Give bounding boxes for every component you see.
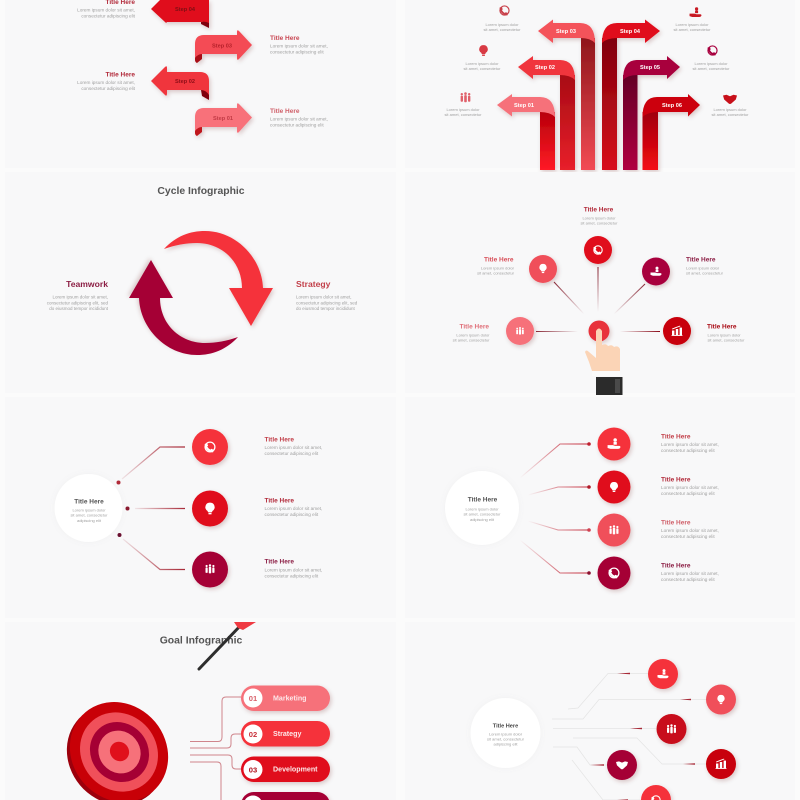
hub circle: Lorem ipsum dolor [489,732,523,736]
text: lower right title [707,324,745,342]
text: branch one: Title Here [264,436,294,444]
node: bulb [706,684,736,714]
text: top title: sit amet, consectetur [581,220,618,226]
pill: 01 marketing [241,686,330,711]
text: step 02 label: sit amet, consectetur [464,66,501,71]
text: step 03 description: Lorem ipsum dolor sit amet, [270,44,328,48]
text: step 01 description: consectetur adipiscing elit [270,122,324,128]
text: step 02 description: Lorem ipsum dolor sit amet, [77,80,135,85]
text: right title [686,256,724,276]
heading: cycle infographic: Cycle Infographic [157,186,245,197]
text: strategy: Strategy [296,279,331,289]
text: left title [477,256,515,276]
arrow: step 03: Step 03 [212,44,232,50]
text: step 03 label: sit amet, consectetur [484,27,521,32]
arrow: step 05 upward right: Step 05 [640,65,660,71]
arrow: step 02: Step 02 [175,79,195,85]
arrow: step 03 upward left [538,20,595,170]
panel: radial touch diagram [405,172,795,395]
node: people [656,714,686,744]
panel: four branch diagram [405,397,795,618]
node: handshake [607,750,637,780]
icon: pointing hand [585,328,622,395]
text: teamwork: Lorem ipsum dolor sit amet, [52,294,108,300]
hub circle: Title Here [493,724,518,730]
node: center button [588,320,610,342]
hub circle: adipiscing elit [77,518,102,523]
text: branch two [661,476,719,496]
text: branch four: Lorem ipsum dolor sit amet, [661,571,719,576]
text: step 01 label: sit amet, consectetur [445,112,482,117]
text: teamwork: consectetur adipiscing elit, sed [47,300,108,306]
text: teamwork: do eiusmod tempor incididunt [49,306,109,311]
pill: 03 development: 03 [249,765,257,774]
text: teamwork [47,279,109,311]
pill: 02 strategy: 02 [249,730,257,739]
text: step 02 label [464,61,501,71]
node: top phone [584,236,612,264]
arrow: step 03 upward left: Step 03 [556,29,576,35]
text: top title: Lorem ipsum dolor [582,216,616,220]
text: left title: Title Here [484,256,514,264]
text: branch four: consectetur adipiscing elit [661,577,715,582]
node: people [192,552,228,588]
text: step 03 label [484,22,521,32]
hub circle [54,474,122,542]
text: step 03 description: Title Here [270,35,300,42]
pill: 01 marketing: 01 [249,694,258,703]
arrow: step 04 upward right: Step 04 [620,29,641,35]
text: step 06 label [712,107,749,117]
node: bulb [192,490,228,526]
node: phone [598,556,630,590]
node: hand [648,659,678,689]
pill: 04 cropped [241,792,330,800]
text: branch three: Lorem ipsum dolor sit amet, [264,568,322,572]
text: lower left title: Title Here [459,324,489,330]
text: step 04 label: Lorem ipsum dolor [675,22,709,27]
hub circle: adipiscing elit [470,517,495,522]
arrow: step 01: Step 01 [213,116,233,122]
node: chart [706,749,736,779]
text: step 01 description: Title Here [270,108,300,115]
arrow: step 05 upward right [623,56,680,170]
arrow: step 04: Step 04 [175,7,196,13]
hub circle: adipiscing elit [493,742,518,746]
node: left bulb [529,255,557,283]
text: branch three: Title Here [661,520,691,526]
text: step 04 label [674,22,711,32]
text: branch two: consectetur adipiscing elit [661,491,715,496]
pill: 02 strategy: Strategy [273,730,301,738]
hub circle: sit amet, consectetur [71,512,108,518]
hub circle: Lorem ipsum dolor [72,508,106,512]
text: lower right title: sit amet, consectetur [708,338,745,342]
text: step 05 label [693,61,730,71]
text: branch four: Title Here [661,562,691,570]
node: right hand [642,258,670,286]
text: lower right title: Title Here [707,324,737,330]
text: branch two: Lorem ipsum dolor sit amet, [264,506,322,511]
text: step 06 label: sit amet, consectetur [712,112,749,117]
text: branch two: Title Here [661,476,691,484]
node: lower right chart [663,317,691,345]
text: branch one: consectetur adipiscing elit [264,451,319,456]
text: step 04 label: sit amet, consectetur [674,27,711,32]
text: lower left title [453,324,490,342]
icon: target board [47,682,188,800]
arrow: step 06 upward right: Step 06 [662,103,682,109]
text: lower left title: Lorem ipsum dolor [456,332,490,338]
arrow: step 01 upward left: Step 01 [514,103,534,109]
panel: step arrows tree [405,0,795,170]
connector arrow marks [590,673,695,800]
text: branch one: Title Here [661,434,691,440]
icon: arrow dart [199,622,256,669]
connectors with dots [520,442,591,575]
text: strategy [296,279,358,311]
panel: goal infographic [5,622,396,800]
text: top title: Title Here [584,206,614,214]
hub circle: sit amet, consectetur [464,512,501,516]
text: step 04 description: consectetur adipiscing elit [81,14,136,18]
text: step 01 description: Lorem ipsum dolor sit amet, [270,116,328,122]
text: right title: Lorem ipsum dolor [686,266,720,270]
text: lower left title: sit amet, consectetur [453,338,490,342]
text: branch three: consectetur adipiscing elit [264,574,319,578]
text: lower right title: Lorem ipsum dolor [708,332,741,338]
heading: goal infographic: Goal Infographic [160,636,242,646]
hub circle: Title Here [468,496,498,504]
panel: cycle infographic [5,172,396,393]
text: step 05 label: sit amet, consectetur [693,66,730,71]
panel: network diagram [405,622,795,800]
text: left title: sit amet, consectetur [477,270,515,276]
text: top title [581,206,618,226]
text: step 03 label: Lorem ipsum dolor [485,22,519,27]
text: right title: Title Here [686,256,716,264]
text: step 02 label: Lorem ipsum dolor [465,61,499,66]
node: hand [598,428,630,460]
text: branch one: Lorem ipsum dolor sit amet, [264,445,322,450]
text: strategy: Lorem ipsum dolor sit amet, [296,294,352,300]
text: strategy: consectetur adipiscing elit, sed [296,300,358,306]
hub circle: sit amet, consectetur [487,736,525,742]
text: branch one: Lorem ipsum dolor sit amet, [661,442,719,447]
connectors with dots [116,447,185,570]
text: branch one: consectetur adipiscing elit [661,448,715,453]
node: lower left people [506,317,534,345]
text: branch two: consectetur adipiscing elit [264,512,319,517]
node: phone cropped [641,785,671,800]
text: step 05 label: Lorem ipsum dolor [694,61,728,66]
pill: 03 development: Development [273,766,318,774]
text: branch two: Lorem ipsum dolor sit amet, [661,485,719,490]
arrow: step 02 upward left [518,56,575,170]
text: step 06 label: Lorem ipsum dolor [713,107,747,112]
arrow: step 04 [151,0,209,28]
text: branch four [661,562,719,582]
arrow: step 01 upward left [497,94,555,170]
text: branch three: Lorem ipsum dolor sit amet, [661,528,719,533]
hub circle: Title Here [74,498,104,506]
pill: 01 marketing: Marketing [273,694,307,702]
node: phone [192,429,228,465]
text: branch two: Title Here [264,498,294,504]
arrow: cycle left crimson [129,260,238,355]
text: step 02 description: Title Here [105,72,135,78]
connector lines [552,674,706,800]
text: branch one [661,434,719,453]
radial connector lines [536,267,660,332]
icon: phone step 03 [500,6,509,15]
panel: step arrows zigzag [5,0,396,168]
hub circle [470,698,540,768]
panel: three branch diagram [5,397,396,618]
arrow: step 02 upward left: Step 02 [535,65,555,71]
arrow: step 04 upward right [602,20,660,170]
icon: clock step 05 [708,46,717,55]
text: branch two [264,498,322,517]
node: bulb [598,470,630,504]
icon: people step 01 [461,92,470,102]
text: step 04 description: Lorem ipsum dolor sit amet, [77,8,135,12]
hub circle: Lorem ipsum dolor [465,506,499,512]
node: people [598,514,630,546]
connectors to pills [190,697,241,800]
arrow: step 03 [195,30,252,63]
text: step 01 label [445,107,482,117]
arrow: cycle right red [164,231,273,326]
text: teamwork: Teamwork [66,279,108,289]
text: branch three: consectetur adipiscing elit [661,534,715,539]
hub circle [445,471,519,545]
text: step 04 description [77,0,136,18]
text: strategy: do eiusmod tempor incididunt [296,306,356,311]
text: right title: sit amet, consectetur [686,270,724,276]
arrow: step 02 [151,66,209,100]
text: branch one [264,436,322,456]
text: step 03 description: consectetur adipiscing elit [270,50,324,54]
pill: 03 development [241,756,330,782]
text: step 02 description [77,72,136,91]
text: left title: Lorem ipsum dolor [481,266,515,270]
text: step 03 description [270,35,328,54]
text: branch three [264,558,322,578]
pill: 02 strategy [241,721,330,746]
icon: hand step 04 [690,7,701,17]
text: branch three [661,520,719,539]
text: step 01 label: Lorem ipsum dolor [446,107,480,112]
icon: handshake step 06 [723,95,737,104]
icon: bulb step 02 [479,45,488,56]
arrow: step 06 upward right [642,94,700,170]
arrow: step 01 [195,103,252,136]
text: branch three: Title Here [264,558,294,566]
text: step 01 description [270,108,328,128]
text: step 02 description: consectetur adipiscing elit [81,86,136,91]
